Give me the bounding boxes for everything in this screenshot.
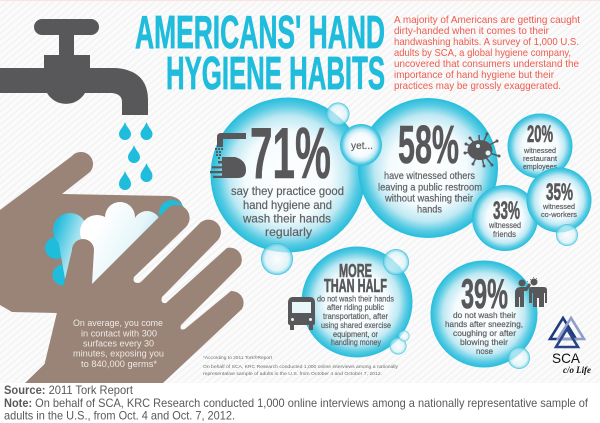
caption: more than half xyxy=(317,294,394,347)
hand text: germs fact: to 840,000 germs* xyxy=(81,359,157,370)
caption: 71%: wash their hands xyxy=(242,212,331,226)
caption: more than half: using shared exercise xyxy=(321,321,391,330)
intro paragraph: adults by SCA, a global hygiene company, xyxy=(394,47,571,59)
caption: 39%: coughing or after xyxy=(453,328,516,338)
stat: 71%: 71% xyxy=(250,114,331,194)
intro paragraph: dirty-handed when it comes to their xyxy=(394,25,549,37)
title: HYGIENE HABITS xyxy=(166,47,385,99)
caption: 71%: say they practice good xyxy=(231,184,344,198)
bubble: 33 percent: witnessed xyxy=(488,220,521,230)
caption: more than half: after riding public xyxy=(327,303,384,312)
caption: 39%: do not wash their xyxy=(453,310,516,320)
bubble: small above 71% xyxy=(326,102,350,126)
caption: more than half: handling money xyxy=(331,338,381,347)
stat: 39%: 39% xyxy=(461,270,508,317)
bubble: 20 percent: witnessed xyxy=(523,146,556,155)
bubble: yet xyxy=(340,124,382,166)
footnotes: On behalf of SCA, KRC Research conducted 1,000 online interviews among a nationally xyxy=(203,364,399,370)
logo: SCA: SCA xyxy=(552,350,581,366)
bubble: 33 percent: 33% xyxy=(493,197,520,225)
logo: SCA: c/o Life xyxy=(563,366,592,376)
intro paragraph: handwashing habits. A survey of 1,000 U.S. xyxy=(394,36,579,48)
bubble: 33 percent: friends xyxy=(493,229,516,239)
intro paragraph: importance of hand hygiene but their xyxy=(394,69,554,81)
soap foam xyxy=(45,200,185,290)
bubble: 35 percent: witnessed xyxy=(542,202,575,211)
caption: 58%: hands xyxy=(417,204,442,216)
title xyxy=(135,6,385,99)
logo: SCA xyxy=(550,318,592,376)
back hand xyxy=(0,152,183,383)
heading: more than half: MORE xyxy=(339,261,372,281)
caption: 39%: hands after sneezing, xyxy=(445,319,523,329)
source and note: adults in the U.S., from Oct. 4 and Oct. 7, 2012. xyxy=(4,408,235,422)
hand text: germs fact: On average, you come xyxy=(73,318,163,329)
bubble: 39 percent xyxy=(430,260,538,368)
caption: 71% xyxy=(231,184,344,239)
bubble: yet: yet... xyxy=(351,141,373,152)
caption: more than half: do not wash their hands xyxy=(317,294,394,304)
bubble: small below 35% xyxy=(556,224,578,246)
bubble: 20 percent: employees xyxy=(523,162,557,171)
front hand xyxy=(40,205,244,383)
hand text: germs fact: surfaces every 30 xyxy=(83,338,154,350)
icon: water drops xyxy=(119,122,152,190)
heading: more than half: THAN HALF xyxy=(324,276,387,296)
icon: people sneezing xyxy=(515,277,547,307)
bubble: 35 percent: co-workers xyxy=(541,210,577,219)
caption: 71%: regularly xyxy=(265,225,312,239)
caption: 58% xyxy=(378,170,482,216)
icon: bus xyxy=(288,297,315,330)
title: AMERICANS' HAND xyxy=(135,6,385,58)
caption: 58%: have witnessed others xyxy=(384,170,475,182)
bubble: more than half xyxy=(288,246,412,358)
footnotes: representative sample of adults in the U.S. from October 4 and October 7, 2012. xyxy=(203,371,382,377)
hand text: germs fact xyxy=(73,318,164,370)
caption: 39%: blowing their xyxy=(460,337,508,347)
caption: 39%: nose xyxy=(476,346,493,356)
caption: 58%: leaving a public restroom xyxy=(378,182,482,194)
source and note: Source: 2011 Tork Report xyxy=(4,383,134,397)
icon: faucet xyxy=(0,19,148,115)
caption: 71%: hand hygiene and xyxy=(243,198,332,212)
icon: germ xyxy=(464,132,500,168)
illustration: washing hands xyxy=(0,152,244,383)
footnotes: *According to 2011 Tork®Report xyxy=(203,354,273,361)
bubble: 20 percent: 20% xyxy=(527,121,553,148)
stat: 58%: 58% xyxy=(398,115,459,175)
bubble: 33 percent xyxy=(472,185,538,251)
hand text: germs fact: minutes, exposing you xyxy=(73,348,164,360)
intro paragraph: A majority of Americans are getting caught xyxy=(394,14,580,26)
bubbles: small around more than half xyxy=(383,249,410,354)
intro paragraph: practices may be grossly exaggerated. xyxy=(394,80,561,92)
bubble: 35 percent xyxy=(526,168,592,232)
source and note xyxy=(4,383,589,422)
bubble: 20 percent: restaurant xyxy=(523,154,558,163)
bubble: small beside 39% xyxy=(508,347,530,369)
bubble: small below 71% xyxy=(261,243,293,275)
icon: hand under tap xyxy=(210,133,246,178)
intro paragraph xyxy=(394,14,580,92)
bubble: 20 percent xyxy=(508,114,572,178)
hand text: germs fact: in contact with 300 xyxy=(81,328,157,340)
caption: more than half: transportation, after xyxy=(323,312,388,321)
heading: more than half xyxy=(324,261,387,296)
caption: 39% xyxy=(445,310,523,356)
footnotes xyxy=(203,354,399,377)
bubble: 35 percent: 35% xyxy=(546,179,573,206)
caption: 58%: without washing their xyxy=(384,192,473,204)
intro paragraph: uncovered that consumers understand the xyxy=(394,58,579,70)
bubble: 58 percent xyxy=(358,98,500,238)
bubble: 71 percent xyxy=(210,98,366,252)
caption: more than half: equipment, or xyxy=(333,330,378,339)
